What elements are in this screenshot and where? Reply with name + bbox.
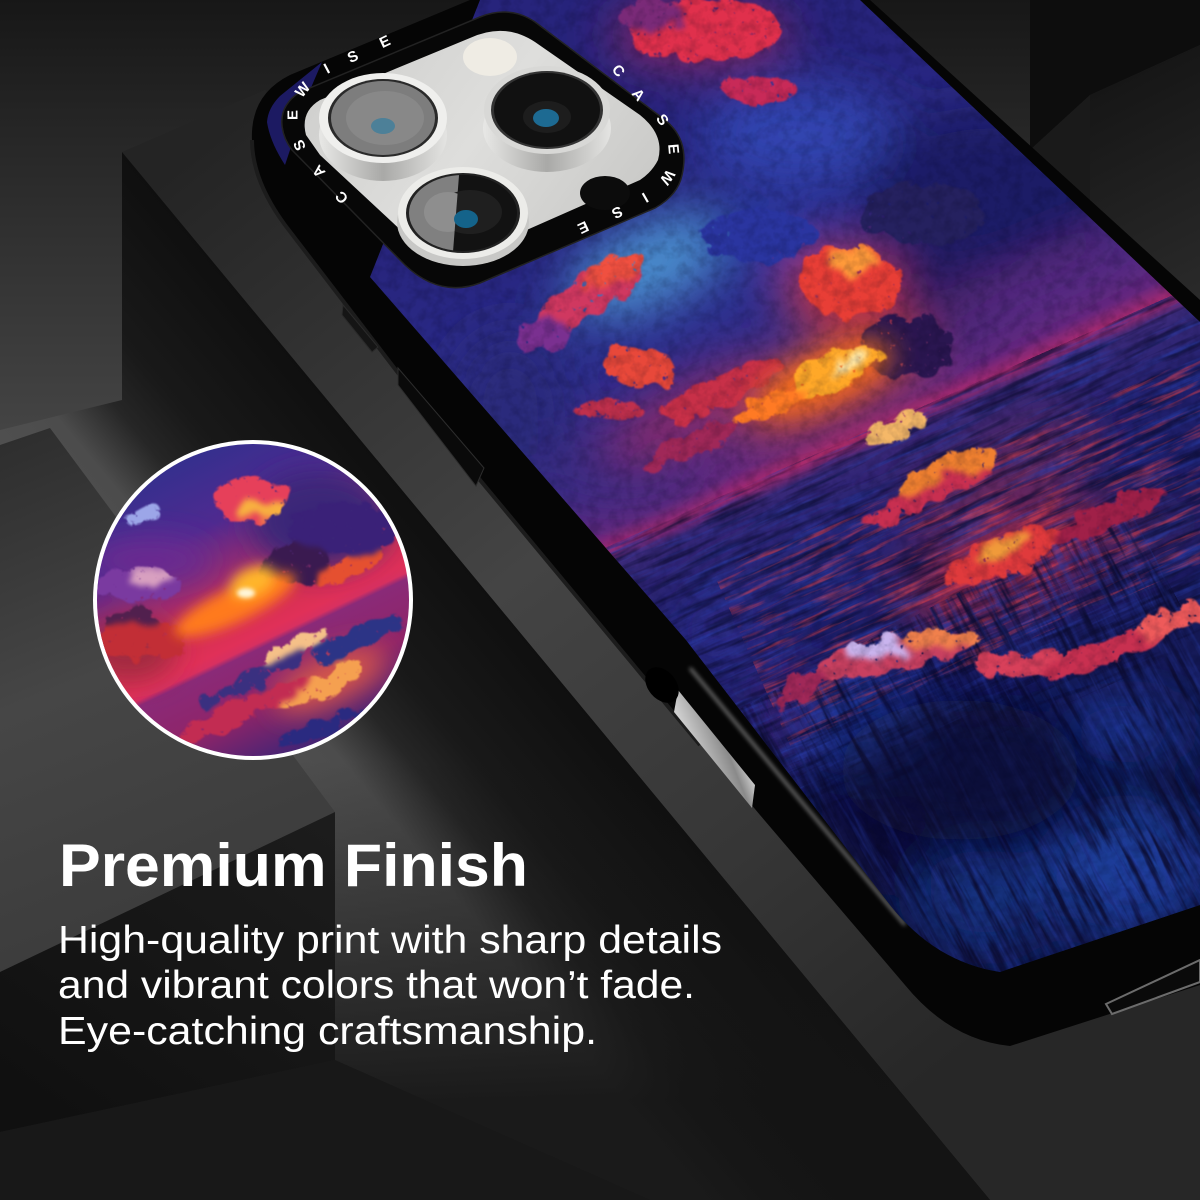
- action button: [342, 305, 378, 352]
- dark centre of foreground water: [840, 700, 1080, 840]
- circular detail inset of artwork: [85, 440, 420, 760]
- flash: [463, 38, 517, 76]
- body text: Eye-catching craftsmanship.: [58, 1010, 597, 1053]
- charging port: [1106, 960, 1200, 1014]
- CASEWISE ring lettering, left: C: [332, 187, 352, 207]
- cloud flecks: [517, 0, 987, 475]
- sun core: [732, 344, 888, 424]
- phone case body: [252, 0, 1200, 1046]
- lens: upper right: [483, 66, 611, 172]
- pedestal block: side face and floor: [0, 152, 990, 1200]
- black bumper ring: [282, 12, 684, 288]
- flecked sea streaks: [606, 296, 1200, 804]
- camera island: [282, 12, 684, 288]
- CASEWISE ring lettering, left: E: [377, 32, 393, 52]
- steep foreground brush strokes: [740, 518, 1200, 972]
- CASEWISE ring lettering, right: [575, 61, 682, 237]
- breaking wave crest: [769, 595, 1200, 718]
- volume button: [398, 368, 484, 486]
- body text: [58, 919, 722, 1053]
- CASEWISE ring lettering, right: C: [608, 61, 628, 81]
- CASEWISE ring lettering, right: I: [639, 189, 651, 205]
- CASEWISE ring lettering, left: W: [292, 78, 315, 101]
- CASEWISE ring lettering, right: S: [652, 111, 672, 129]
- sea reflection: [857, 407, 1169, 597]
- body text: High-quality print with sharp details: [58, 919, 722, 962]
- CASEWISE ring lettering, right: E: [575, 217, 591, 237]
- sun core: [237, 588, 255, 598]
- sun glow: [749, 327, 901, 429]
- silver camera plate: [305, 31, 660, 259]
- CASEWISE ring lettering, right: E: [664, 143, 682, 155]
- broad colour masses: [450, 3, 1200, 950]
- microphone hole: [580, 176, 630, 210]
- lens: upper left: [319, 73, 447, 181]
- CASEWISE ring lettering, left: S: [290, 137, 310, 153]
- CASEWISE ring lettering, right: A: [628, 85, 648, 105]
- phone side buttons and ports: [342, 305, 1200, 1014]
- CASEWISE ring lettering, left: A: [309, 161, 329, 181]
- glossy rim highlight: [690, 668, 905, 925]
- left stepped block: [0, 428, 650, 1200]
- CASEWISE ring lettering, left: S: [345, 47, 361, 67]
- body text: and vibrant colors that won’t fade.: [58, 964, 695, 1007]
- CASEWISE ring lettering, left: I: [321, 61, 333, 77]
- lens: bottom: [397, 167, 529, 266]
- CASEWISE ring lettering, right: S: [609, 202, 625, 222]
- CASEWISE ring lettering, left: [284, 32, 393, 207]
- side button: [674, 690, 755, 808]
- CASEWISE ring lettering, right: W: [655, 166, 678, 188]
- paint grain: [360, 0, 1200, 1000]
- navy sliver of artwork beside camera ring: [267, 62, 322, 165]
- phone case artwork: sunset over sea: [360, 0, 1200, 1172]
- CASEWISE ring lettering, left: E: [284, 110, 302, 120]
- title: Premium Finish: [59, 832, 528, 899]
